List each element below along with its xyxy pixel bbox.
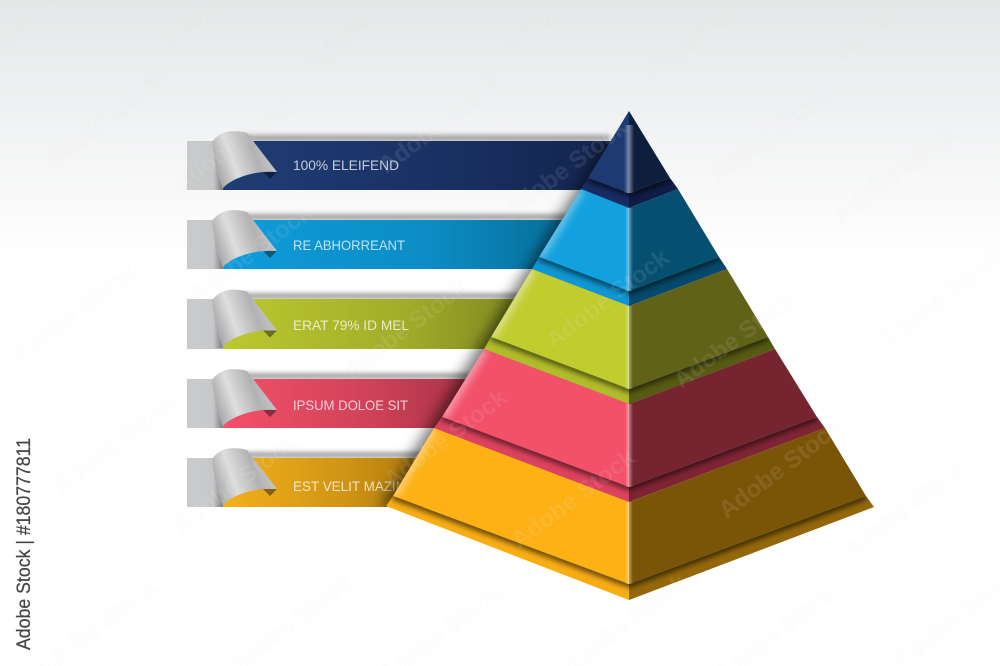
centre spine highlights (624, 125, 634, 584)
ribbon 3: green (187, 290, 520, 349)
stock watermarks: Adobe Stock (714, 414, 848, 524)
panel: ribbon list (187, 131, 610, 507)
page background (0, 0, 1000, 260)
stock watermarks: Adobe Stock (49, 389, 183, 499)
tier 5: yellow (386, 428, 874, 600)
tier 4: red (434, 349, 825, 502)
ribbon 4: red: IPSUM DOLOE SIT (293, 397, 408, 413)
stock watermarks: Adobe Stock (39, 64, 173, 174)
tier 3: green (484, 269, 775, 404)
stock watermarks: Adobe Stock (669, 284, 803, 394)
tier 1: navy (581, 111, 678, 208)
ribbon 5: yellow (187, 448, 430, 507)
stock watermarks: Adobe Stock (184, 199, 318, 309)
stock watermarks: Adobe Stock (704, 79, 838, 189)
stock watermarks: Adobe Stock (829, 119, 963, 229)
ribbon 1: navy (187, 131, 610, 190)
stock watermarks: Adobe Stock (507, 444, 641, 554)
ribbon 1: navy: 100% ELEIFEND (293, 157, 399, 173)
stock watermarks: Adobe Stock (839, 454, 973, 564)
stock watermarks: Adobe Stock (169, 429, 303, 539)
ribbon 4: red (187, 369, 470, 428)
pyramid (386, 111, 874, 600)
stock watermarks: Adobe Stock (169, 89, 303, 199)
stock watermarks: Adobe Stock (379, 384, 513, 494)
stock watermarks: Adobe Stock (374, 69, 508, 179)
stock id caption: Adobe Stock | #180777811 (14, 438, 35, 650)
ribbon 5: yellow: EST VELIT MAZIM (293, 478, 407, 494)
stock watermarks: Adobe Stock (541, 244, 675, 354)
ribbon 3: green: ERAT 79% ID MEL (293, 317, 409, 333)
ribbon 2: blue (187, 210, 570, 269)
stock watermarks: Adobe Stock (339, 274, 473, 384)
pyramid shadow on ribbons (375, 141, 630, 507)
stock watermarks: Adobe Stock (7, 259, 141, 369)
ribbon 2: blue: RE ABHORREANT (293, 237, 405, 253)
stock watermarks: Adobe Stock (499, 114, 633, 224)
tier 2: blue (532, 189, 727, 306)
